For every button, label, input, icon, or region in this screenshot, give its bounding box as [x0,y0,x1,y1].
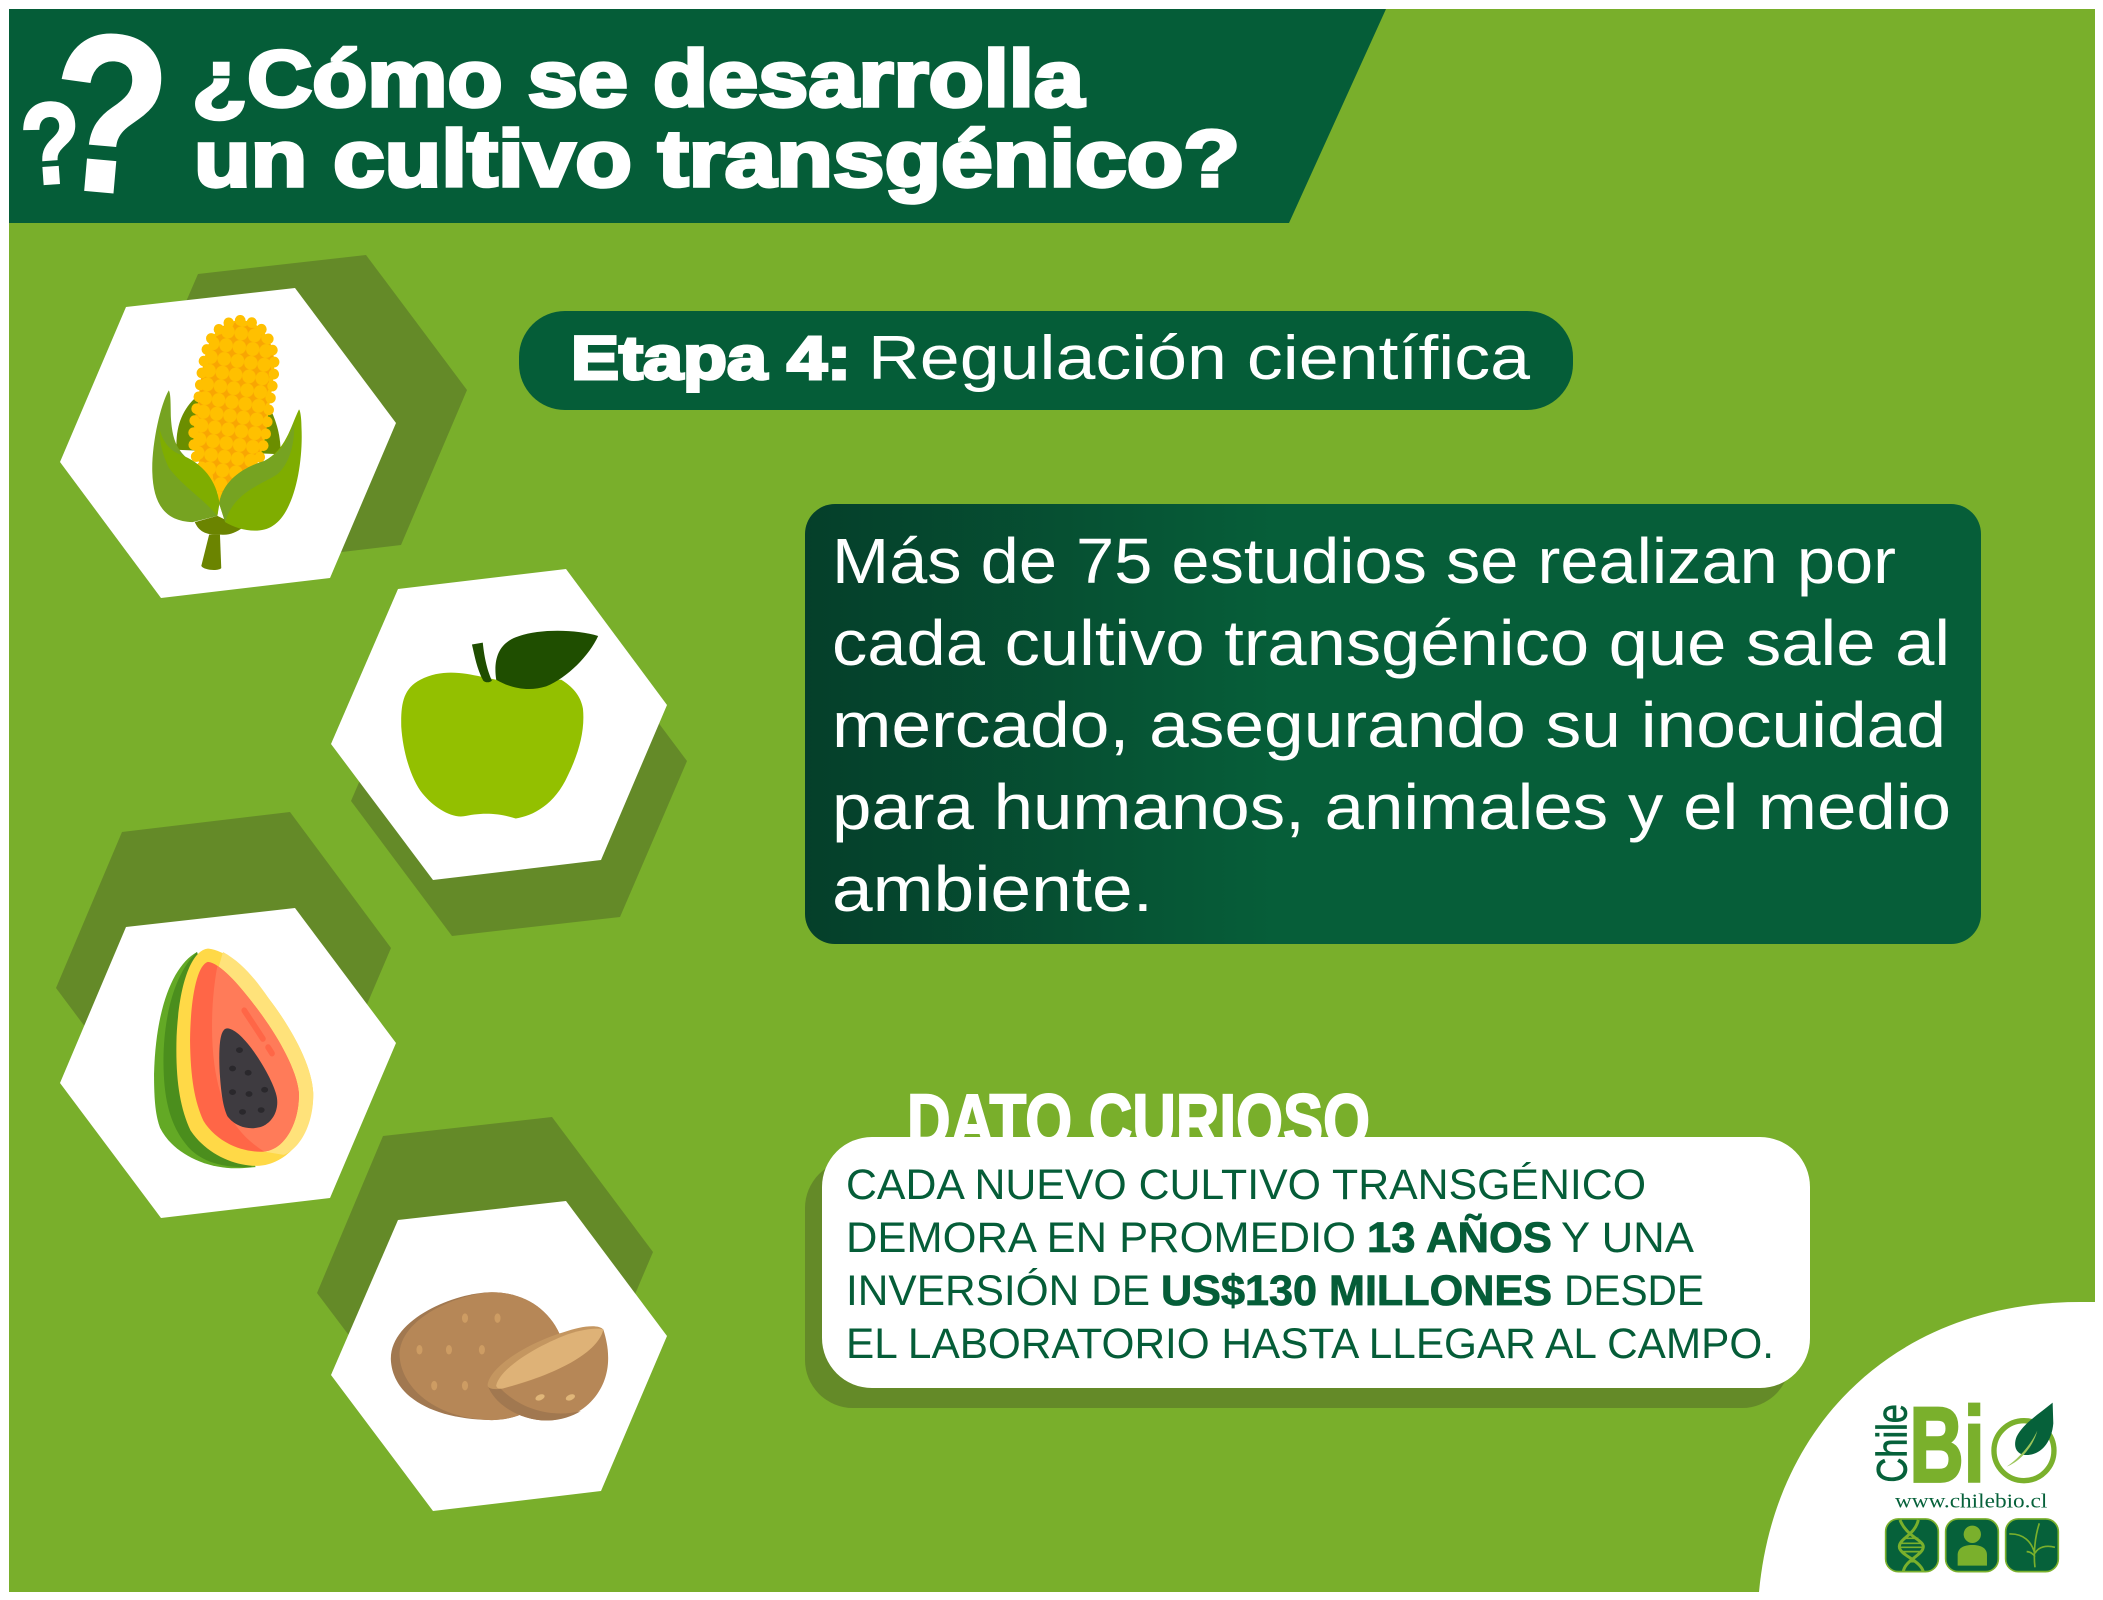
dato curioso text: EL LABORATORIO HASTA LLEGAR AL CAMPO. [846,1320,1774,1368]
dato curioso text [846,1161,1774,1368]
icon: corn [152,320,302,570]
dato curioso text: DEMORA EN PROMEDIO [846,1214,1356,1262]
dato curioso text: 13 AÑOS [1367,1214,1552,1262]
main text: Más de 75 estudios se realizan por [832,525,1896,597]
hexagon: corn [60,255,467,598]
logo: ChileBio: Chile [1869,1404,1917,1483]
icon: plant [2006,1519,2058,1572]
main text [832,525,1951,925]
icon: question marks: ? [17,77,85,210]
main text: cada cultivo transgénico que sale al [832,607,1950,679]
stage pill [519,311,1573,410]
title text [192,34,1240,203]
dato curioso text: Y UNA [1561,1214,1694,1262]
logo: ChileBio: Bi [1909,1385,1985,1505]
stage name: Regulación científica [868,324,1531,393]
dato curioso text: DESDE [1564,1267,1704,1315]
title banner [9,0,1386,244]
white logo corner [1759,1302,2095,1592]
icon: person [1946,1519,1998,1572]
main text: mercado, asegurando su inocuidad [832,689,1946,761]
hexagon: papaya [56,812,396,1218]
icon: papaya [154,949,313,1168]
dato curioso heading: DATO CURIOSO [907,1079,1370,1162]
dato curioso text: INVERSIÓN DE [846,1267,1150,1315]
stage label: Etapa 4: [571,324,851,392]
main text: para humanos, animales y el medio [832,771,1951,843]
logo: ChileBio [1869,1385,2058,1572]
hexagon: potato [317,1117,667,1511]
icon: dna [1886,1519,1938,1572]
main text box [805,504,1981,944]
hexagon: apple [331,569,687,936]
title text: un cultivo transgénico? [194,114,1240,203]
title text: ¿Cómo se desarrolla [192,34,1085,123]
dato curioso text: CADA NUEVO CULTIVO TRANSGÉNICO [846,1161,1646,1209]
dato curioso panel [805,1079,1810,1408]
icon: potato [391,1292,608,1421]
main text: ambiente. [832,853,1153,925]
logo: ChileBio: www.chilebio.cl [1895,1490,2048,1512]
icon: apple [401,631,598,819]
dato curioso text: US$130 MILLONES [1161,1267,1552,1315]
